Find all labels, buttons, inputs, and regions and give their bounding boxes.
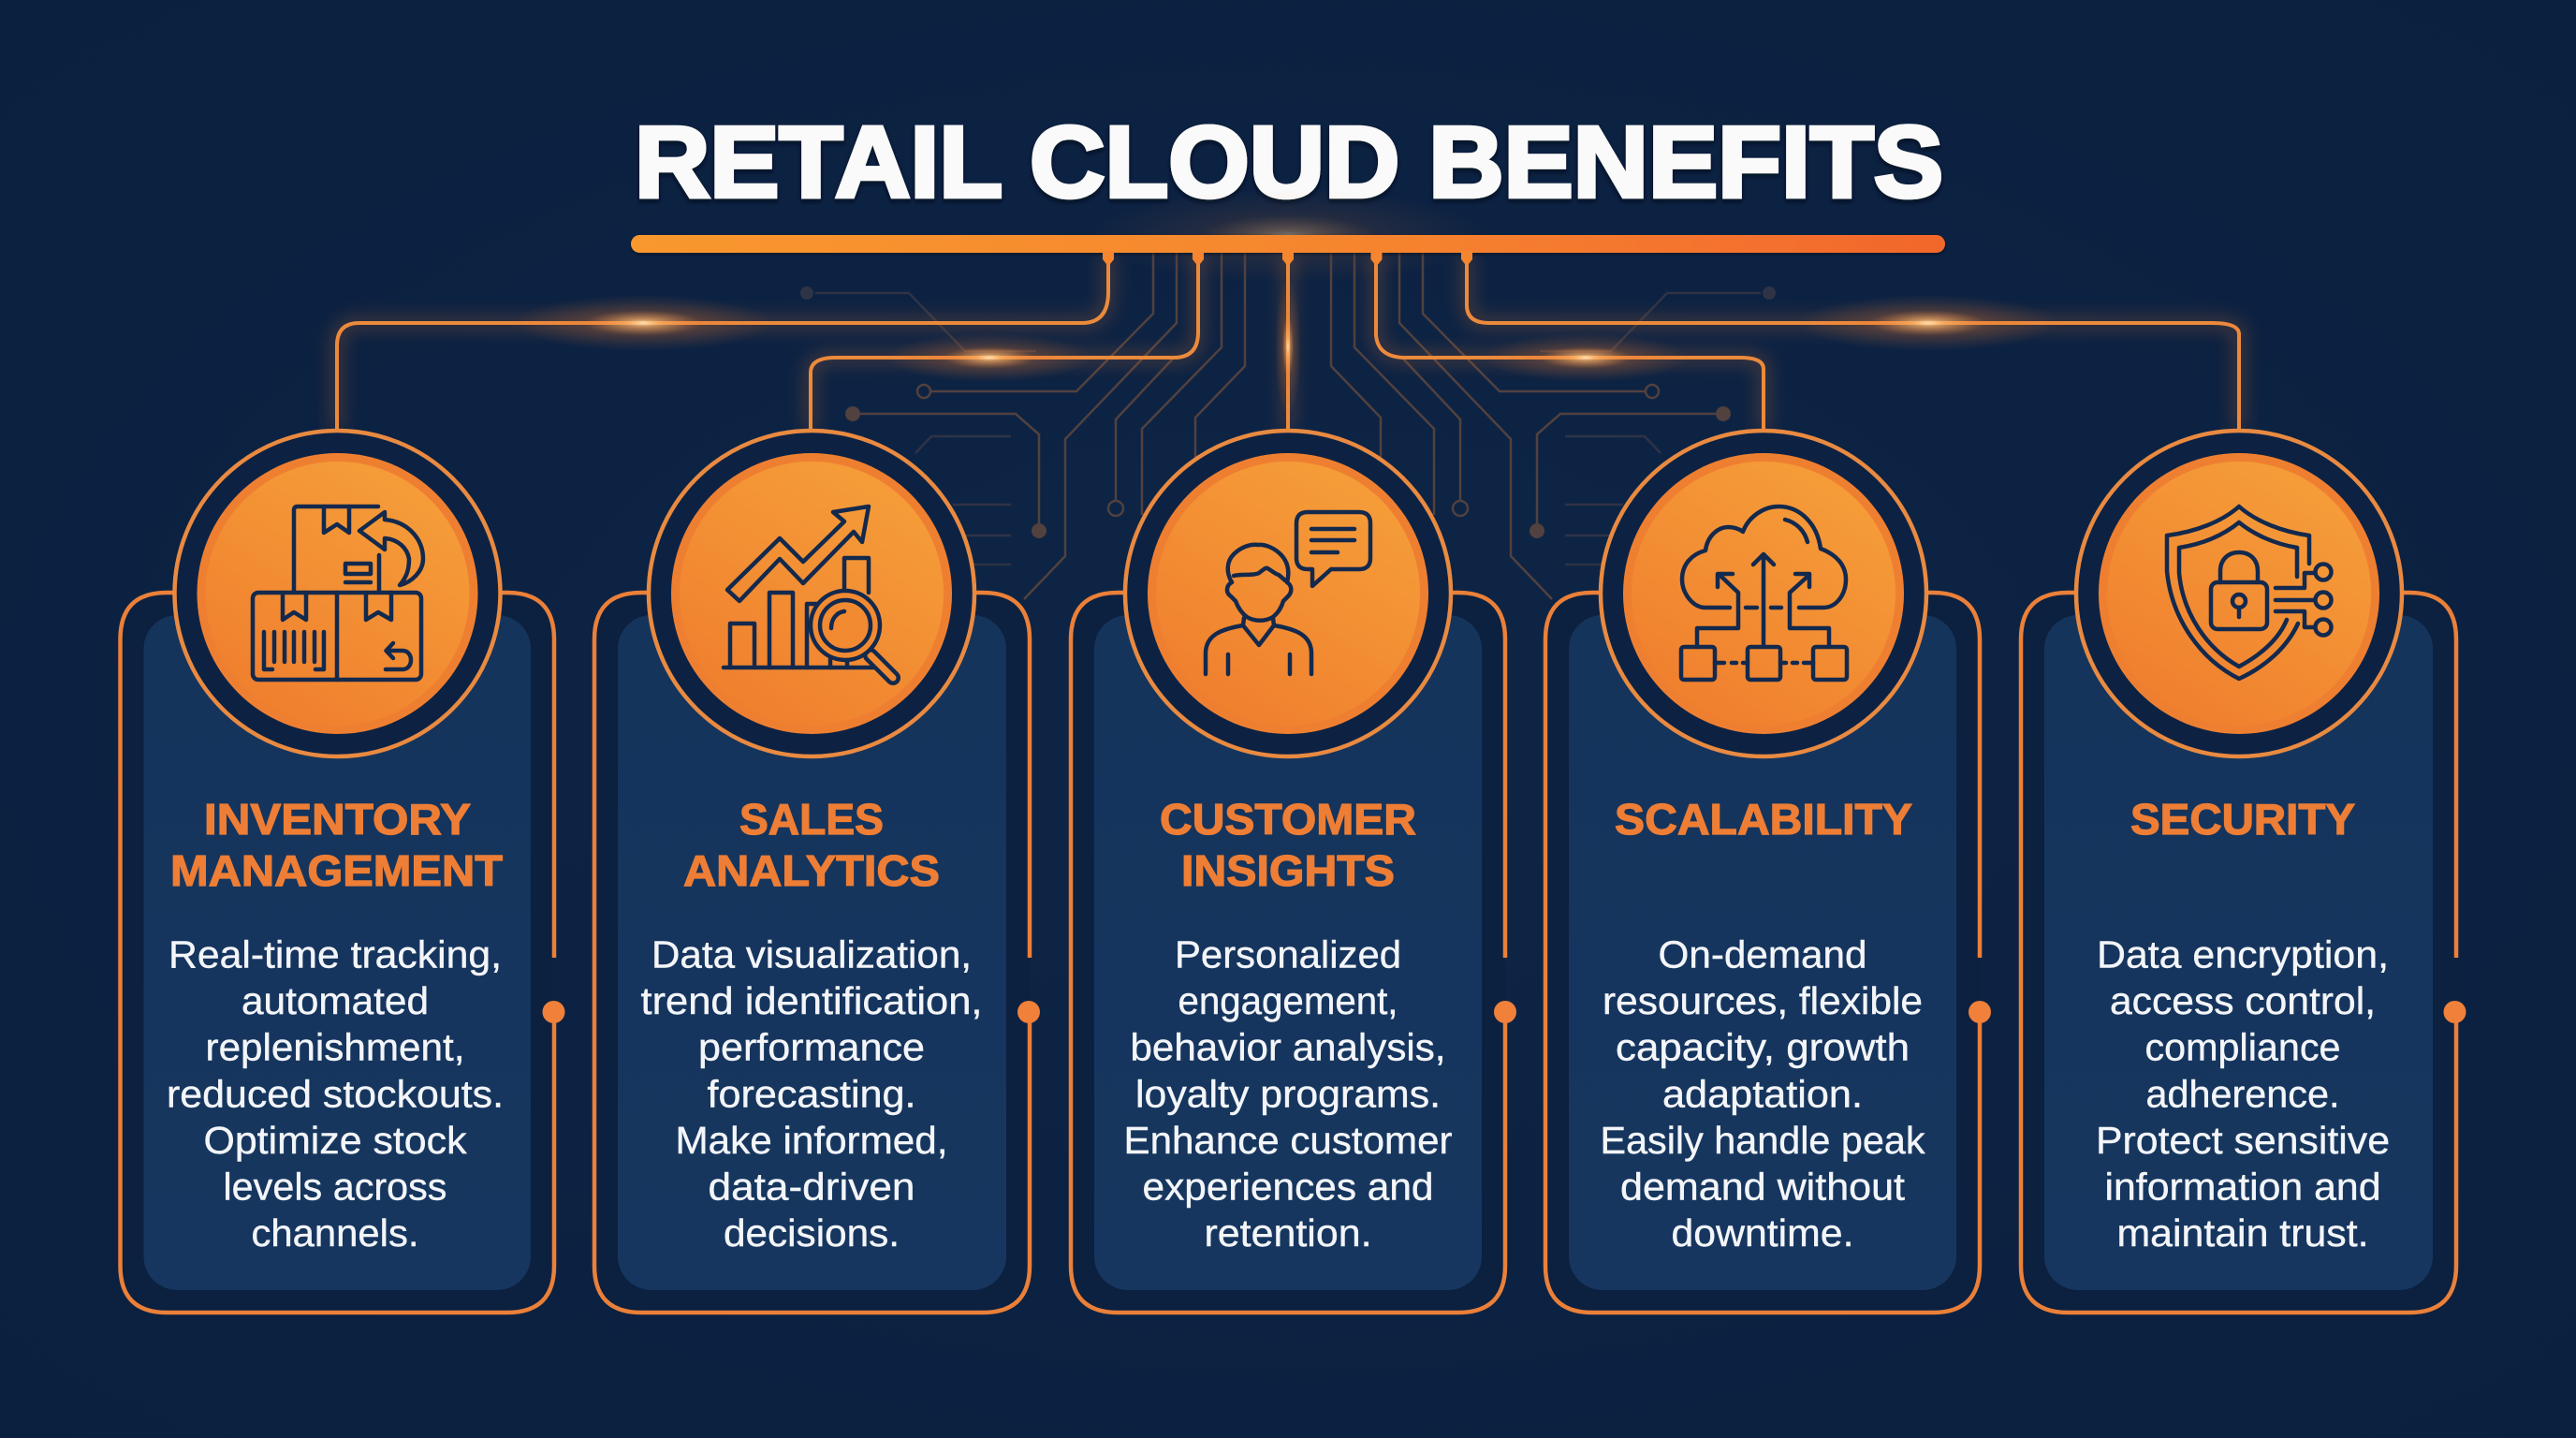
panel 2 body text: trend identification,	[640, 979, 983, 1022]
panel 3 heading: INSIGHTS	[1181, 846, 1395, 895]
panel 4 heading: SCALABILITY	[1615, 795, 1912, 844]
panel 4 connector dot	[1969, 1001, 1991, 1023]
icon: bar chart with magnifier	[724, 506, 893, 678]
panel 3 heading: CUSTOMER	[1160, 795, 1416, 844]
panel 2 heading: ANALYTICS	[683, 846, 940, 895]
panel 1 body text	[167, 932, 504, 1255]
panel 1 body text: Real-time tracking,	[168, 932, 502, 976]
panel 1 heading: INVENTORY	[204, 795, 471, 844]
circuit board traces	[800, 252, 1776, 599]
panel 2 heading	[683, 795, 940, 895]
panel 3 body text: experiences and	[1142, 1165, 1434, 1208]
panel 2 orange disc	[671, 453, 952, 734]
panel 5 body text: compliance	[2145, 1026, 2340, 1069]
glow above title bar	[1091, 189, 1485, 283]
title: RETAIL CLOUD BENEFITS	[635, 105, 1943, 218]
panel 4 card	[1569, 615, 1956, 1290]
panel 2 connector dot	[1017, 1001, 1040, 1023]
light glints on connectors	[512, 276, 2059, 417]
panel 5 body text: Data encryption,	[2097, 932, 2389, 976]
panel 4 body text: adaptation.	[1662, 1072, 1863, 1115]
panel 2 circle ring	[649, 431, 974, 756]
panel: customer insights	[1071, 431, 1516, 1313]
panel 1 heading: MANAGEMENT	[170, 846, 503, 895]
title bar	[631, 235, 1945, 264]
panel 5 body text	[2096, 932, 2390, 1255]
panel 2 body text	[640, 932, 983, 1255]
connectors from title bar to circles	[337, 253, 2239, 431]
connector 5	[1467, 253, 2239, 431]
panel 3 body text	[1123, 932, 1453, 1255]
panel 5 outline	[2021, 593, 2456, 1313]
panel 4 circle ring	[1601, 431, 1926, 756]
panel 1 body text: automated	[242, 979, 429, 1022]
panel 3 frame	[1071, 593, 1505, 1313]
panel 3 body text: Personalized	[1175, 932, 1401, 976]
panel: sales analytics	[594, 431, 1040, 1313]
panel 2 body text: Data visualization,	[651, 932, 972, 976]
panel 2 card	[618, 615, 1006, 1290]
panel 5 body text: maintain trust.	[2117, 1211, 2368, 1255]
panel: security	[2021, 431, 2466, 1313]
panel 3 connector dot	[1494, 1001, 1516, 1023]
panel 4 body text	[1601, 932, 1925, 1255]
panel 1 body text: levels across	[223, 1165, 447, 1208]
panel 3 body text: Enhance customer	[1123, 1119, 1453, 1162]
connector 1	[337, 253, 1108, 431]
panel 4 body text: demand without	[1620, 1165, 1906, 1208]
panel 2 body text: decisions.	[724, 1211, 900, 1255]
panel 2 body text: forecasting.	[708, 1072, 915, 1115]
panel: scalability	[1545, 431, 1991, 1313]
panel 2 body text: data-driven	[708, 1165, 915, 1208]
panel 3 outline	[1071, 593, 1505, 1313]
panel 3 circle ring	[1125, 431, 1451, 756]
icon: cloud scaling network	[1681, 506, 1847, 680]
panel 1 body text: Optimize stock	[204, 1119, 467, 1162]
icon: shield with padlock	[2167, 506, 2331, 679]
panel 2 body text: performance	[698, 1026, 925, 1069]
panel 3 body text: loyalty programs.	[1135, 1072, 1441, 1115]
panel 1 body text: replenishment,	[206, 1026, 464, 1069]
panel 4 body text: downtime.	[1672, 1211, 1853, 1255]
panel 5 body text: information and	[2104, 1165, 2381, 1208]
icon: customer with speech bubble	[1206, 512, 1370, 674]
panel 1 heading	[170, 795, 503, 895]
panel 4 outline	[1545, 593, 1980, 1313]
panel: inventory management	[120, 431, 565, 1313]
icon: boxes with return arrow	[253, 506, 423, 680]
panel 3 body text: behavior analysis,	[1131, 1026, 1445, 1069]
panel 5 body text: adherence.	[2145, 1072, 2340, 1115]
panel 5 heading: SECURITY	[2130, 795, 2355, 844]
panel 2 heading: SALES	[739, 795, 884, 844]
panel 3 card	[1094, 615, 1482, 1290]
panel 5 card	[2044, 615, 2433, 1290]
panel 5 circle ring	[2076, 431, 2402, 756]
panel 3 heading	[1160, 795, 1416, 895]
panel 5 body text: Protect sensitive	[2096, 1119, 2390, 1162]
panel 5 connector dot	[2443, 1001, 2466, 1023]
connector 3	[1286, 253, 1290, 431]
panel 2 frame	[594, 593, 1030, 1313]
panel 1 orange disc	[197, 453, 477, 734]
connector 2	[811, 253, 1198, 431]
panel 3 body text: engagement,	[1178, 979, 1398, 1022]
panel 4 body text: resources, flexible	[1603, 979, 1923, 1022]
panel 5 orange disc	[2099, 453, 2379, 734]
panel 4 body text: On-demand	[1659, 932, 1866, 976]
panel 2 outline	[594, 593, 1030, 1313]
panel 1 circle ring	[174, 431, 500, 756]
panel 1 body text: reduced stockouts.	[167, 1072, 504, 1115]
panel 1 card	[144, 615, 531, 1290]
panel 4 frame	[1545, 593, 1980, 1313]
panel 4 body text: Easily handle peak	[1601, 1119, 1925, 1162]
panel 1 frame	[120, 593, 554, 1313]
panel 2 body text: Make informed,	[676, 1119, 947, 1162]
connector 4	[1376, 253, 1764, 431]
panel 3 body text: retention.	[1204, 1211, 1372, 1255]
panel 5 body text: access control,	[2110, 979, 2376, 1022]
panel 4 orange disc	[1623, 453, 1904, 734]
panel 5 frame	[2021, 593, 2456, 1313]
panel 1 body text: channels.	[251, 1211, 419, 1255]
panel 3 orange disc	[1148, 453, 1428, 734]
panel 1 connector dot	[543, 1001, 565, 1023]
panel 1 outline	[120, 593, 554, 1313]
panel 4 body text: capacity, growth	[1616, 1026, 1910, 1069]
